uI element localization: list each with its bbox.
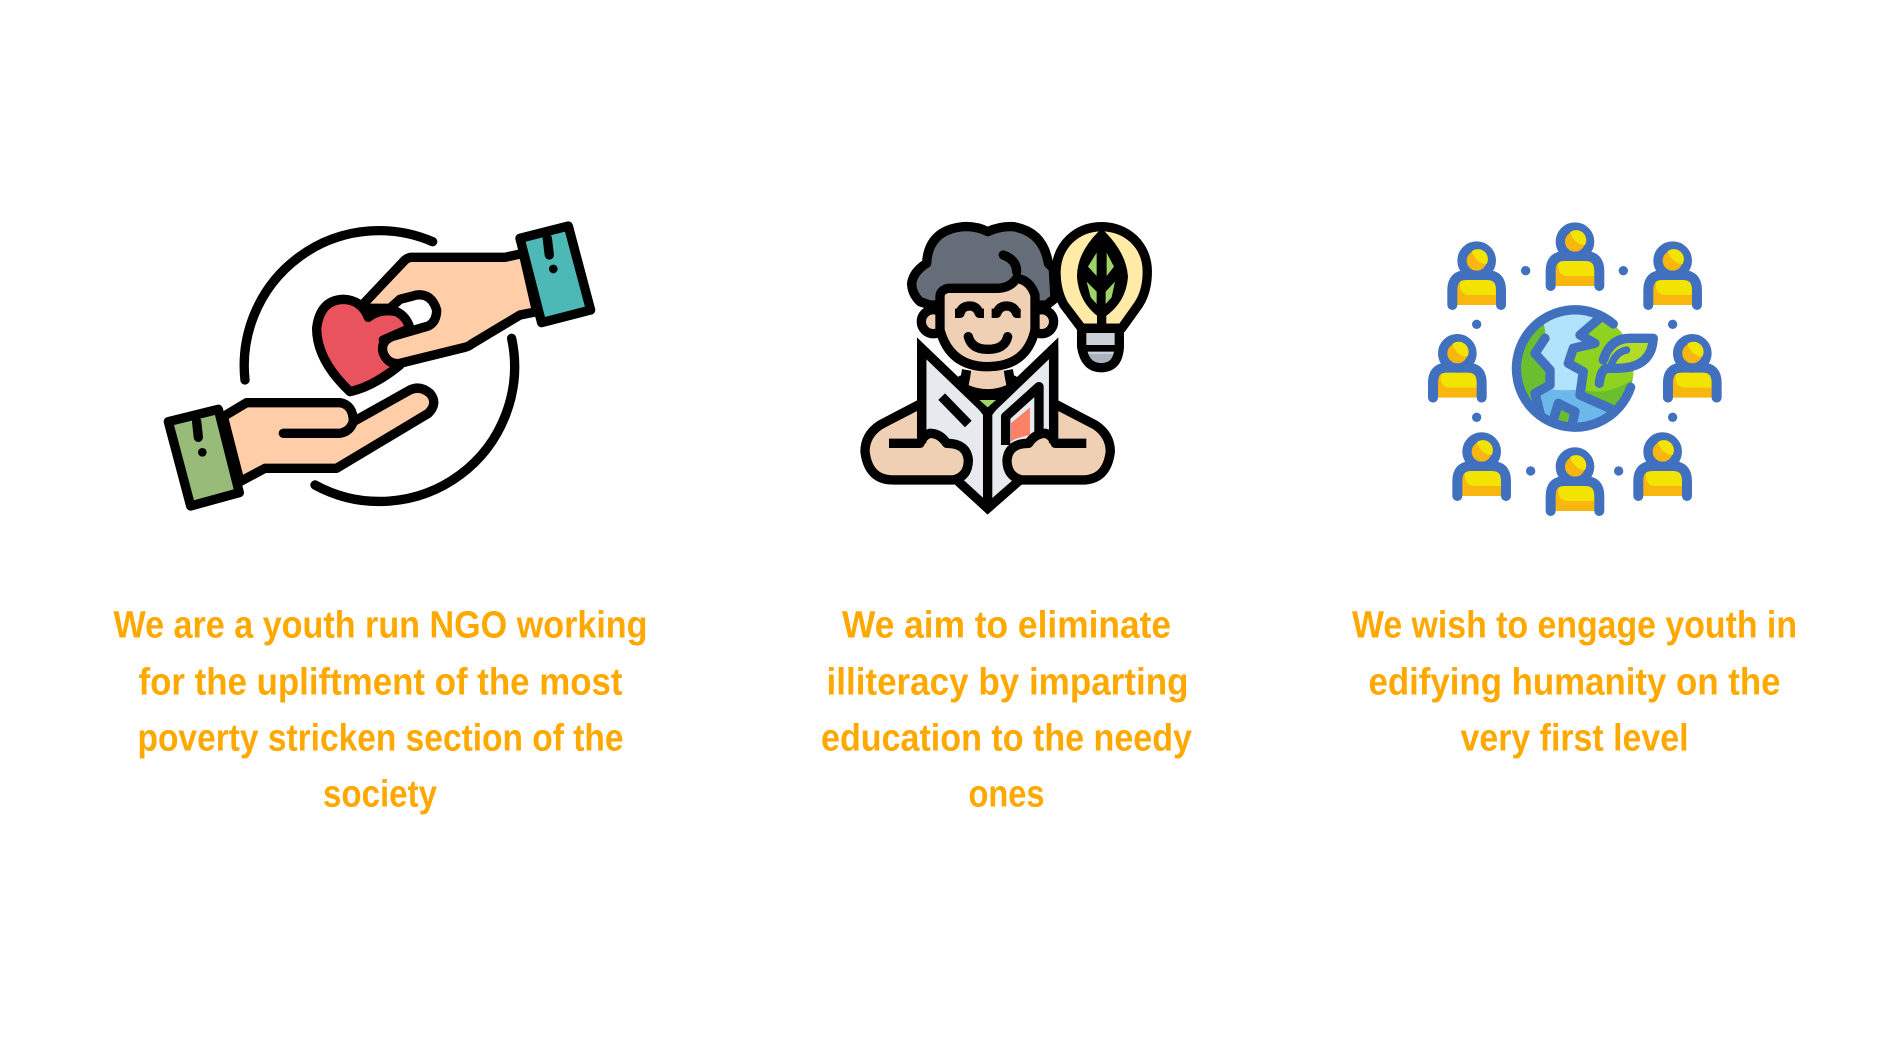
upper cuff <box>520 226 591 323</box>
text block: eliminate illiteracy: We aim to eliminate <box>842 604 1171 646</box>
ring of people <box>1433 227 1717 511</box>
circular arrows around hands <box>244 231 515 501</box>
text block: engage youth: We wish to engage youth in <box>1352 604 1797 646</box>
globe <box>1513 308 1653 430</box>
text block: eliminate illiteracy: ones <box>968 774 1044 816</box>
text block: eliminate illiteracy: illiteracy by imparting <box>826 662 1188 704</box>
text block: eliminate illiteracy <box>821 604 1192 816</box>
neck and shirt <box>962 370 1013 413</box>
light bulb <box>1056 227 1147 368</box>
text block: engage youth: very first level <box>1460 718 1688 760</box>
heart <box>317 299 410 392</box>
text block: youth run NGO: poverty stricken section of the <box>138 718 624 760</box>
text block: youth run NGO: We are a youth run NGO working <box>114 604 648 646</box>
connecting dots <box>1472 266 1677 476</box>
text block: youth run NGO <box>114 604 648 816</box>
text block: engage youth: edifying humanity on the <box>1368 662 1780 704</box>
icon: people around the globe <box>1433 227 1717 511</box>
lower cuff <box>168 409 239 506</box>
icon: child reading a book with idea bulb <box>865 227 1147 508</box>
text block: eliminate illiteracy: education to the needy <box>821 718 1192 760</box>
text block: youth run NGO: society <box>323 774 437 816</box>
book <box>922 348 1054 508</box>
lower hand <box>223 388 434 482</box>
text block: engage youth <box>1352 604 1797 760</box>
ears <box>921 310 1054 334</box>
text block: youth run NGO: for the upliftment of the most <box>138 662 623 704</box>
icon: hands sharing a heart <box>168 226 591 506</box>
face <box>940 255 1035 367</box>
hair <box>912 227 1055 305</box>
upper hand <box>364 253 537 364</box>
arms and hands <box>865 348 1110 480</box>
